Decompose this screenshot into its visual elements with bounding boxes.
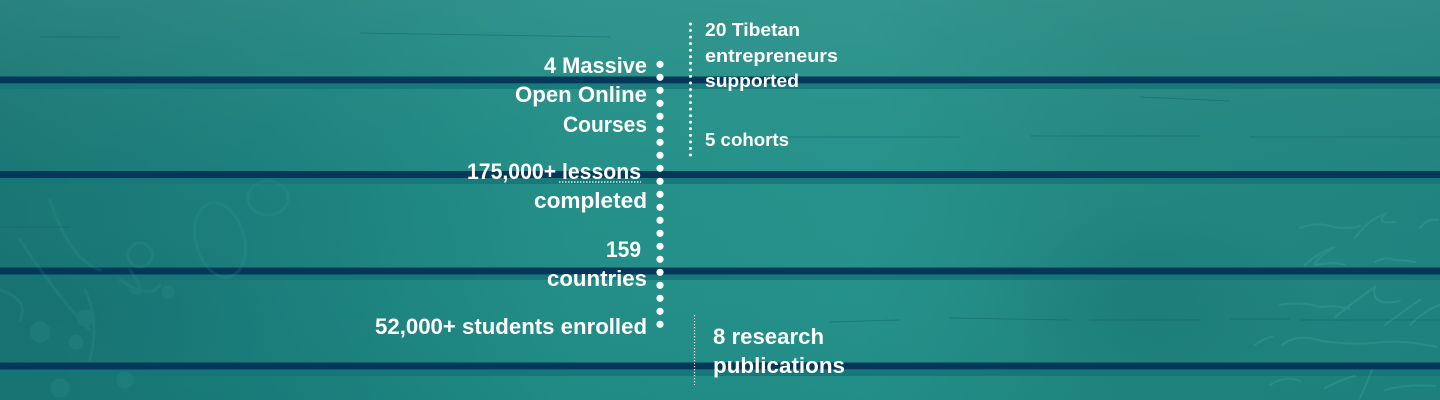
stat: 20 Tibetan entrepreneurs supported: supported [705, 70, 799, 91]
stat: 20 Tibetan entrepreneurs supported [705, 19, 838, 91]
stat: 175,000+ lessons completed [467, 159, 647, 213]
background: faint handwriting, right [1255, 214, 1440, 398]
stat: 8 research publications: publications [713, 353, 845, 378]
dotted divider: upper right [689, 24, 692, 156]
stat: 175,000+ lessons completed: completed [534, 188, 647, 213]
background: faint floral flourish, left [38, 227, 242, 274]
stat: 4 Massive Open Online Courses: Courses [563, 112, 647, 137]
stat: 4 Massive Open Online Courses [515, 53, 647, 137]
stat: 8 research publications [713, 324, 845, 378]
dotted divider: lower right [694, 315, 696, 385]
stat: 20 Tibetan entrepreneurs supported: 20 Tibetan [705, 19, 800, 40]
stat: 175,000+ lessons completed: 175,000+ lessons [467, 159, 641, 184]
stat: 5 cohorts: 5 cohorts [705, 129, 789, 150]
stat: 159 countries [547, 237, 647, 291]
stat: 52,000+ students enrolled: 52,000+ students enrolled [375, 314, 647, 339]
stat: 159 countries: countries [547, 266, 647, 291]
stat: 4 Massive Open Online Courses: Open Online [515, 82, 647, 107]
stat: 159 countries: 159 [606, 237, 641, 262]
stat: 8 research publications: 8 research [713, 324, 824, 349]
dotted timeline: central large dots [656, 61, 664, 328]
stat: 4 Massive Open Online Courses: 4 Massive [544, 53, 647, 78]
dotted underline: lessons [559, 181, 641, 183]
stat: 20 Tibetan entrepreneurs supported: entrepreneurs [705, 45, 838, 66]
